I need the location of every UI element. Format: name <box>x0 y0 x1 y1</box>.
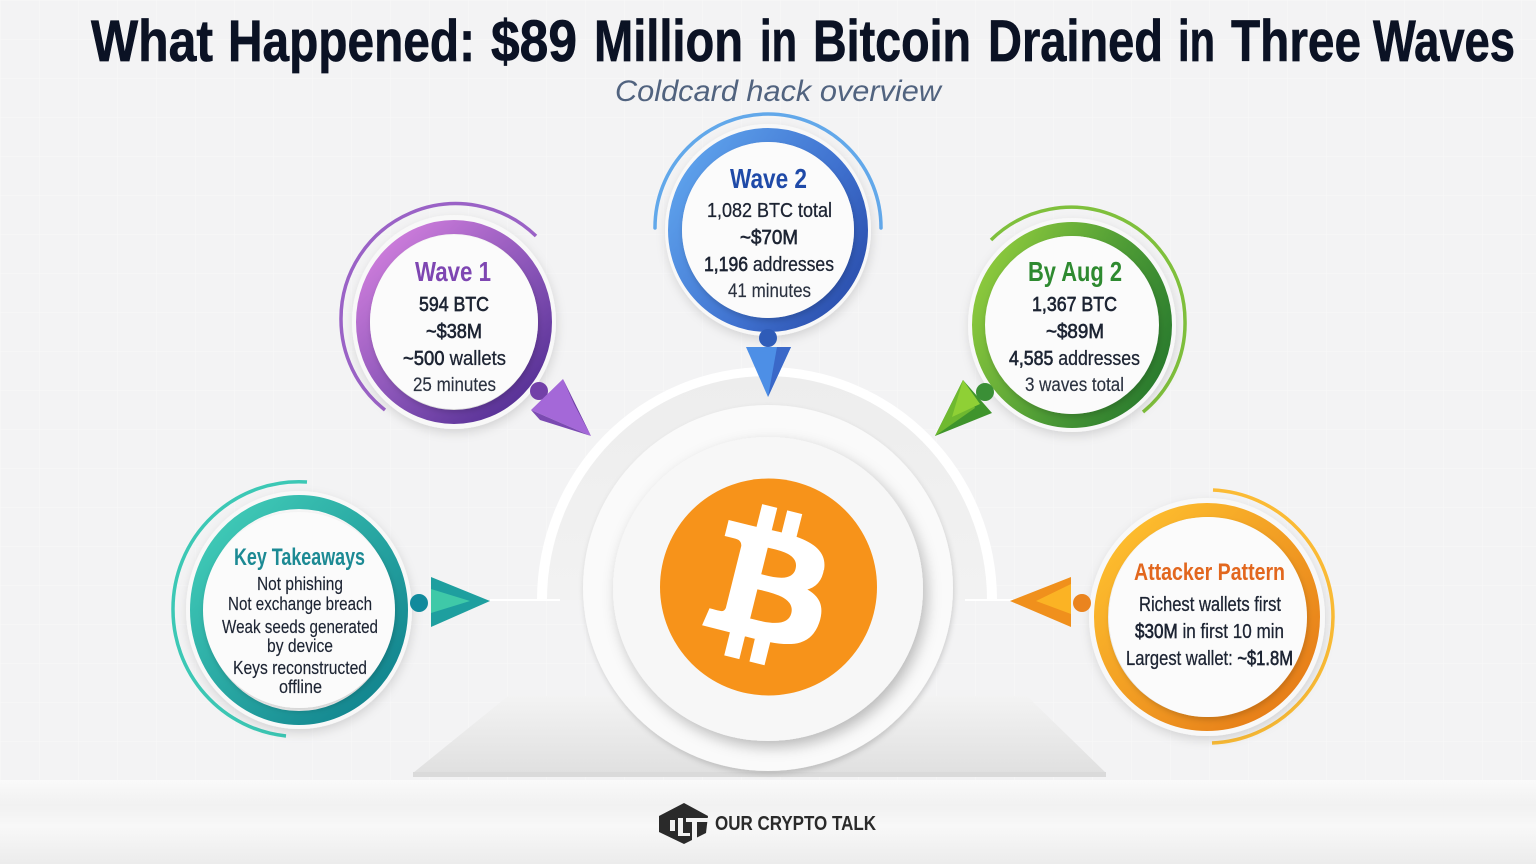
wave 1 details: 594 BTC <box>419 293 489 316</box>
title: Bitcoin <box>813 9 971 74</box>
title: What <box>91 9 213 74</box>
key takeaways arrow <box>410 577 490 627</box>
wave 2 details: ~$70M <box>740 226 798 249</box>
title: Million <box>594 9 743 74</box>
wave 2 details <box>704 199 834 302</box>
attacker pattern ring <box>1089 498 1325 736</box>
wave 2 heading: Wave 2 <box>730 163 807 194</box>
wave 2 details: 1,196 addresses <box>704 253 834 276</box>
footer logo <box>659 803 876 844</box>
by aug 2 heading: By Aug 2 <box>1028 256 1122 287</box>
wave 1 details: 25 minutes <box>413 375 496 396</box>
key takeaways outer arc <box>173 482 307 736</box>
icon: our crypto talk hexagon <box>659 803 708 844</box>
wave 1 ring <box>352 215 556 429</box>
title: in <box>1178 9 1215 74</box>
key takeaways details: offline <box>279 677 322 697</box>
attacker pattern details: Largest wallet: ~$1.8M <box>1126 647 1293 670</box>
key takeaways details: by device <box>267 636 333 656</box>
by aug 2 outer arc <box>991 207 1185 412</box>
key takeaways details: Keys reconstructed <box>233 658 367 678</box>
central arch <box>490 367 1013 601</box>
title: Three <box>1231 9 1361 74</box>
attacker pattern heading: Attacker Pattern <box>1134 559 1285 586</box>
wave 1 heading: Wave 1 <box>415 256 491 287</box>
wave 2 arrow <box>746 329 791 397</box>
attacker pattern details <box>1126 593 1293 670</box>
wave 2 outer arc <box>655 114 881 228</box>
central platform <box>413 696 1106 777</box>
icon: bitcoin logo <box>660 478 877 696</box>
key takeaways details: Not phishing <box>257 574 343 594</box>
title: in <box>760 9 797 74</box>
key takeaways heading: Key Takeaways <box>234 544 365 571</box>
by aug 2 details <box>1009 293 1140 396</box>
by aug 2 details: 1,367 BTC <box>1032 293 1117 316</box>
panel: attacker pattern <box>1010 490 1333 743</box>
subtitle: Coldcard hack overview <box>615 75 943 108</box>
panel: wave 1 <box>341 204 591 436</box>
wave 2 ring <box>665 124 871 336</box>
panel: by aug 2 <box>935 207 1185 436</box>
title <box>91 9 1515 74</box>
wave 1 outer arc <box>341 204 536 410</box>
wave 1 details: ~$38M <box>426 320 482 343</box>
title: Happened: <box>228 9 475 74</box>
attacker pattern arrow <box>1010 577 1091 627</box>
wave 1 arrow <box>530 379 591 436</box>
key takeaways details <box>222 574 378 697</box>
by aug 2 arrow <box>935 380 994 436</box>
wave 2 details: 41 minutes <box>728 281 811 302</box>
key takeaways details: Not exchange breach <box>228 594 372 614</box>
wave 2 details: 1,082 BTC total <box>707 199 832 222</box>
wave 1 details: ~500 wallets <box>403 347 506 370</box>
key takeaways ring <box>186 491 412 729</box>
by aug 2 connector dot <box>976 383 994 401</box>
title: $89 <box>491 9 577 74</box>
attacker pattern details: $30M in first 10 min <box>1135 620 1284 643</box>
by aug 2 ring <box>968 218 1176 432</box>
attacker pattern outer arc <box>1212 490 1333 743</box>
by aug 2 details: ~$89M <box>1046 320 1104 343</box>
attacker pattern details: Richest wallets first <box>1139 593 1281 616</box>
panel: key takeaways <box>173 482 490 736</box>
by aug 2 details: 4,585 addresses <box>1009 347 1140 370</box>
key takeaways details: Weak seeds generated <box>222 617 378 637</box>
by aug 2 details: 3 waves total <box>1025 375 1124 396</box>
central bitcoin medallion <box>583 405 953 771</box>
wave 1 details <box>403 293 506 396</box>
title: Drained <box>988 9 1163 74</box>
footer brand name: OUR CRYPTO TALK <box>715 813 876 835</box>
panel: wave 2 <box>655 114 881 397</box>
